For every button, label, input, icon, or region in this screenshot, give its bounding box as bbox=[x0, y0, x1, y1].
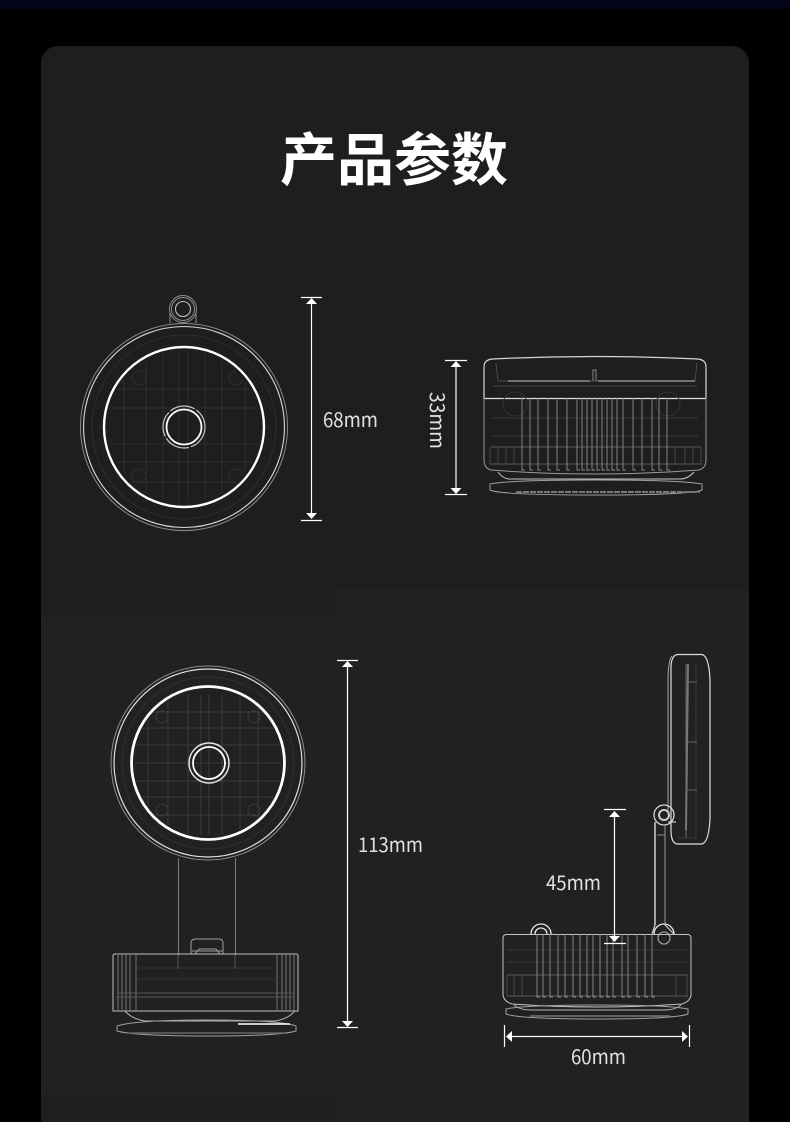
top housing bbox=[484, 356, 706, 398]
cooling fins bbox=[522, 398, 670, 470]
seam bbox=[484, 398, 706, 400]
centre hub bbox=[163, 406, 205, 448]
base plate bbox=[490, 472, 702, 495]
base plate bbox=[506, 1005, 688, 1019]
front disc rings bbox=[80, 324, 288, 530]
dimension: 113mm: 113mm bbox=[358, 829, 423, 858]
dimension: 68mm bbox=[301, 298, 378, 520]
panel: side view extended bbox=[503, 654, 710, 1019]
base body bbox=[113, 954, 298, 1011]
dimension: 113mm bbox=[337, 660, 423, 1028]
dimension: 60mm: 60mm bbox=[571, 1041, 626, 1070]
cooling fins bbox=[537, 934, 655, 997]
extended disc rings bbox=[111, 666, 305, 860]
icon: hanging loop bbox=[170, 296, 196, 323]
dimension: 68mm: 68mm bbox=[323, 404, 378, 433]
hinge and arm bbox=[652, 805, 676, 934]
centre hub bbox=[189, 743, 229, 783]
base plate bbox=[117, 1011, 296, 1036]
title: 产品参数 bbox=[280, 115, 508, 197]
dimension: 33mm: 33mm bbox=[424, 392, 453, 449]
motor grille bbox=[108, 350, 260, 505]
side pivots bbox=[531, 924, 674, 944]
dimension: 45mm bbox=[546, 810, 626, 944]
panel: front view with hanging loop bbox=[80, 296, 288, 530]
lower body bbox=[503, 934, 691, 1007]
latch bbox=[191, 939, 223, 954]
motor grille bbox=[130, 695, 290, 835]
dimension: 45mm: 45mm bbox=[546, 867, 601, 896]
raised head bbox=[668, 654, 710, 844]
dimension: 33mm bbox=[424, 360, 467, 494]
lower body bbox=[484, 392, 706, 474]
stem bbox=[178, 858, 236, 955]
panel: side view folded bbox=[484, 356, 706, 495]
top strip bbox=[0, 0, 790, 9]
dimension: 60mm bbox=[504, 1025, 690, 1070]
panel: front view extended bbox=[111, 666, 305, 1036]
